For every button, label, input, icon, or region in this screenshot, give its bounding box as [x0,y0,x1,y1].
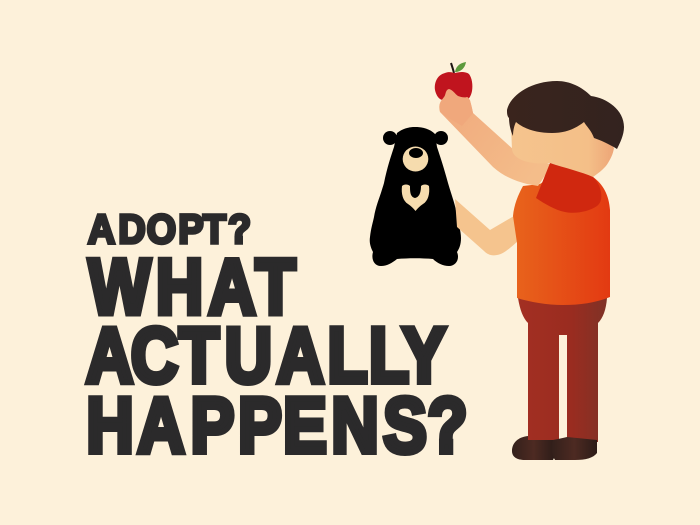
title [86,207,467,469]
apple stem [451,63,454,73]
icon: black bear [370,127,461,266]
bear nose [409,148,423,158]
heading: happens: HAPPENS? [86,383,467,469]
bear left ear [383,131,397,145]
bear muzzle [403,146,428,172]
heading: what: WHAT [89,244,296,331]
person shoes [512,436,597,460]
person hair [507,81,624,149]
bear chest mark [402,184,429,211]
person sleeve [536,163,601,213]
apple fruit [435,72,472,100]
apple leaf [455,62,466,72]
person head [511,105,614,177]
person torso [513,170,610,305]
person legs [518,298,607,442]
left shoe [512,436,555,460]
heading: actually: ACTUALLY [86,313,446,399]
person hand [439,89,473,126]
person far arm [455,199,518,255]
icon: person [439,81,624,460]
person raised arm [439,90,552,186]
bear body [370,127,461,266]
heading: adopt: ADOPT? [88,207,251,253]
right shoe [552,437,597,460]
icon: apple [435,62,473,126]
bear right ear [434,131,448,145]
